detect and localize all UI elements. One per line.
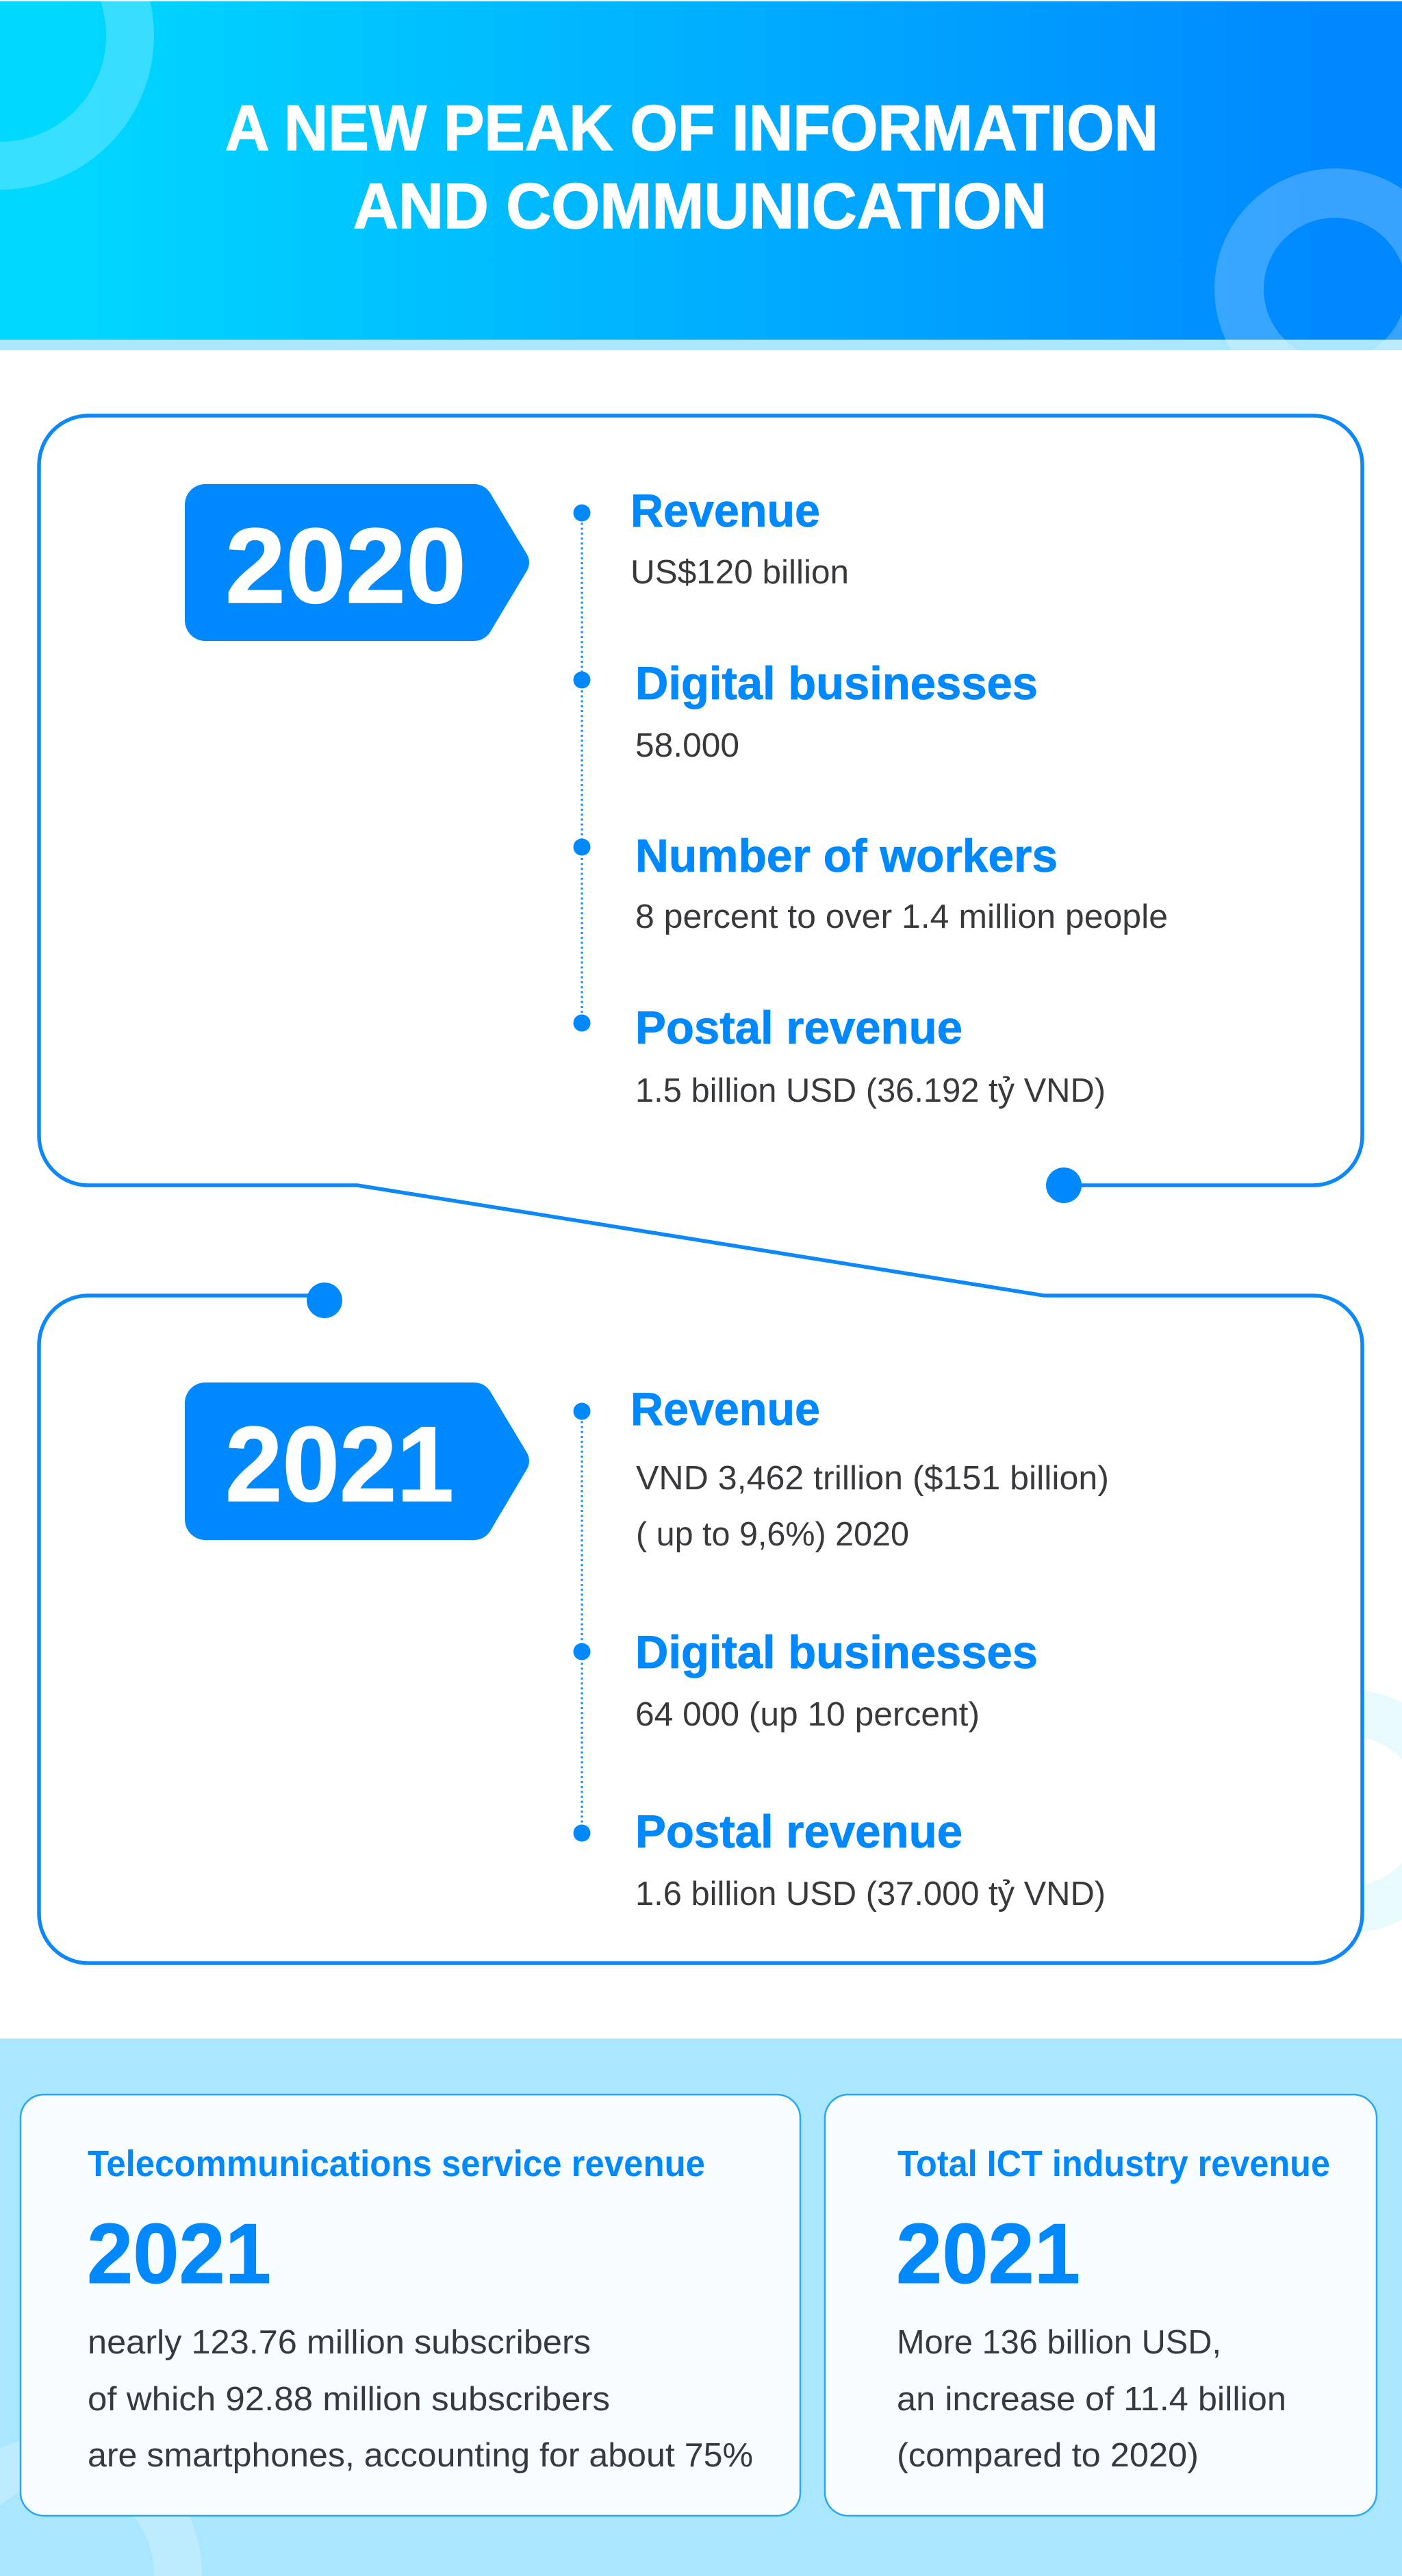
item: digital businesses 2021: Digital businesses: [635, 1626, 1038, 1678]
item: number of workers 2020: Number of workers: [635, 830, 1058, 882]
item: digital businesses 2021: [635, 1626, 1038, 1733]
badge: 2020: [185, 484, 529, 641]
item: postal revenue 2021: Postal revenue: [635, 1806, 963, 1858]
item: revenue 2021: ( up to 9,6%) 2020: [636, 1516, 909, 1553]
item: postal revenue 2021: [635, 1806, 1106, 1912]
panel background: 2021: [39, 1296, 1362, 1963]
panel body text: of which 92.88 million subscribers: [88, 2381, 610, 2418]
badge: 2020: 2020: [225, 507, 466, 626]
panel body text: nearly 123.76 million subscribers: [88, 2324, 591, 2361]
timeline 2021: [574, 1402, 590, 1842]
item: digital businesses 2020: [635, 657, 1038, 764]
panel: 2021: [185, 1382, 1109, 1912]
title: AND COMMUNICATION: [353, 170, 1047, 242]
connector outline linking the 2020 and 2021 panels: [39, 416, 1362, 1963]
panel body text: are smartphones, accounting for about 75%: [88, 2437, 753, 2474]
panel: 2020: [185, 484, 1168, 1109]
panel body text: [88, 2324, 753, 2474]
panel: total ICT industry revenue: [825, 2095, 1377, 2516]
badge: 2021: 2021: [225, 1405, 454, 1524]
title: [225, 92, 1158, 242]
item: number of workers 2020: [635, 830, 1168, 935]
item: revenue 2021: [630, 1383, 1109, 1553]
year: 2021: [87, 2207, 271, 2301]
item: postal revenue 2020: Postal revenue: [635, 1002, 963, 1054]
year: 2021: [896, 2207, 1080, 2301]
item: number of workers 2020: 8 percent to over 1.4 million people: [635, 898, 1168, 935]
panel body text: an increase of 11.4 billion: [897, 2381, 1286, 2418]
item: digital businesses 2020: 58.000: [635, 727, 739, 764]
item: revenue 2021: Revenue: [630, 1383, 820, 1435]
panel body text: (compared to 2020): [897, 2437, 1199, 2474]
item: revenue 2020: Revenue: [630, 485, 820, 537]
title: A NEW PEAK OF INFORMATION: [225, 92, 1158, 164]
panel body text: [897, 2324, 1286, 2474]
decorative ring behind 2021 panel: [1249, 1713, 1402, 1910]
badge: 2021: [185, 1382, 529, 1540]
item: postal revenue 2021: 1.6 billion USD (37.000 tỷ VND): [635, 1876, 1106, 1912]
panel body text: More 136 billion USD,: [897, 2324, 1221, 2361]
item: postal revenue 2020: 1.5 billion USD (36.192 tỷ VND): [635, 1072, 1106, 1109]
header banner: [0, 0, 1402, 385]
footer band: [0, 2038, 1402, 2576]
item: revenue 2021: VND 3,462 trillion ($151 billion): [636, 1460, 1109, 1497]
item: revenue 2020: US$120 billion: [630, 554, 849, 591]
connector dot 2021: [307, 1283, 342, 1318]
item: revenue 2020: [630, 485, 849, 591]
panel heading: Total ICT industry revenue: [897, 2143, 1330, 2184]
panel: telecommunications service revenue: [21, 2095, 800, 2516]
item: digital businesses 2021: 64 000 (up 10 percent): [635, 1696, 980, 1733]
connector dot 2020: [1046, 1167, 1082, 1203]
timeline 2020: [574, 504, 590, 1031]
panel heading: Telecommunications service revenue: [88, 2143, 705, 2184]
item: digital businesses 2020: Digital businesses: [635, 657, 1038, 709]
item: postal revenue 2020: [635, 1002, 1106, 1109]
